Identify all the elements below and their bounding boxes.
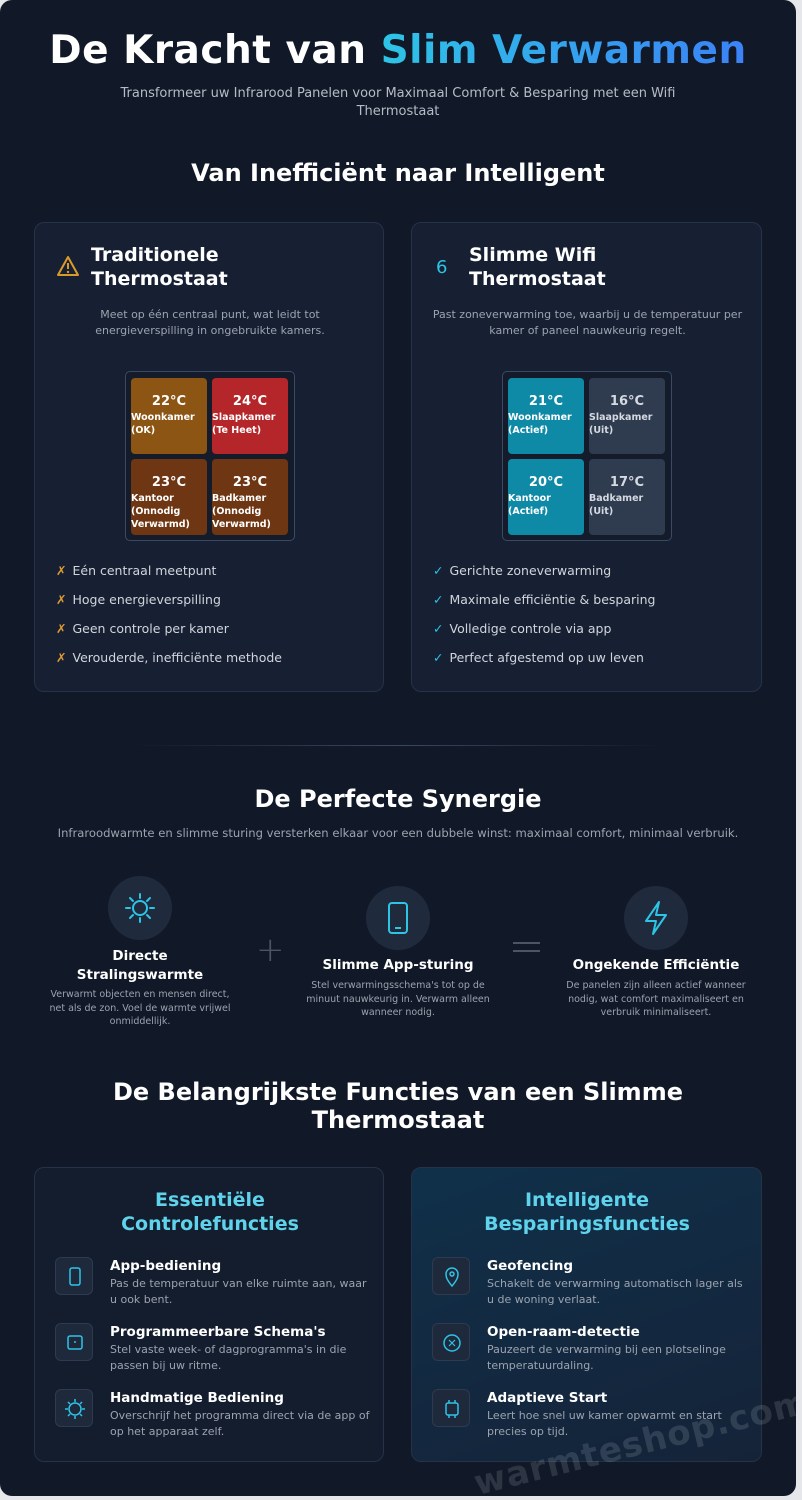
feature: schedules: Programmeerbare Schema's [110,1324,326,1340]
panel: saving functions: Intelligente [525,1189,649,1211]
room grid: Slaapkamer [589,412,652,423]
icon: wifi: 6 [436,257,447,278]
feature: app [55,1257,367,1306]
bullet list: ✗ Verouderde, inefficiënte methode [56,650,282,665]
synergy item: app: Stel verwarmingsschema's tot op de minuut nauwkeurig in. Verwarm alleen wanneer nodig. [306,980,490,1018]
feature: manual: Overschrijf het programma direct via de app of op het apparaat zelf. [110,1409,369,1438]
room grid: Woonkamer [131,412,195,423]
feature: app: App-bediening [110,1258,221,1274]
feature: adaptive start: Adaptieve Start [487,1390,607,1406]
bullet list: ✗ Geen controle per kamer [56,621,229,636]
room grid: (Onnodig [131,506,180,517]
synergy subtitle: Infraroodwarmte en slimme sturing versterken elkaar voor een dubbele winst: maximaal comfort, minimaal verbruik. [58,826,738,840]
room grid: 23°C [233,475,267,490]
room grid: (OK) [131,425,155,436]
heading: section 1: Van Inefficiënt naar Intelligent [191,159,605,187]
room grid: Badkamer [212,493,266,504]
feature: manual: Handmatige Bediening [110,1390,284,1406]
bullet list: ✓ Maximale efficiëntie & besparing [433,592,655,607]
room grid: (Uit) [589,506,613,517]
panel: essential functions: Controlefuncties [121,1213,299,1235]
room grid: Woonkamer [508,412,572,423]
feature: geofencing: Geofencing [487,1258,573,1274]
room grid: 16°C [610,394,644,409]
heading: Thermostaat [91,268,228,290]
room grid: Verwarmd) [131,519,190,530]
feature: open window: Open-raam-detectie [487,1324,640,1340]
heading [91,244,228,290]
heading: Thermostaat [469,268,606,290]
feature: adaptive start [432,1389,722,1438]
bullet list: ✗ Eén centraal meetpunt [56,563,216,578]
feature: app: Pas de temperatuur van elke ruimte aan, waar u ook bent. [110,1277,367,1306]
panel: saving functions: Besparingsfuncties [484,1213,690,1235]
room grid: (Onnodig [212,506,261,517]
feature: adaptive start: Leert hoe snel uw kamer opwarmt en start precies op tijd. [487,1409,722,1438]
room grid: 24°C [233,394,267,409]
bullet list [433,563,655,665]
feature: open window: Pauzeert de verwarming bij een plotselinge temperatuurdaling. [487,1343,726,1372]
panel: essential functions [34,1167,384,1462]
description: Past zoneverwarming toe, waarbij u de temperatuur per kamer of paneel nauwkeurig regelt. [433,308,742,337]
bullet list [56,563,282,665]
room grid: Verwarmd) [212,519,271,530]
feature: schedules: Stel vaste week- of dagprogramma's in die passen bij uw ritme. [110,1343,346,1372]
room grid: 22°C [152,394,186,409]
icon: sun [108,876,172,940]
heading: Traditionele [91,244,219,266]
synergy item: radiant heat: Directe [112,948,168,964]
room grid: (Actief) [508,425,548,436]
room grid [125,371,295,541]
title: De Kracht van Slim Verwarmen [49,28,747,73]
room grid: 20°C [529,475,563,490]
equals sign [513,942,540,952]
icon: warning [57,256,79,276]
bullet list: ✗ Hoge energieverspilling [56,592,221,607]
synergy item: efficiency: De panelen zijn alleen actief wanneer nodig, wat comfort maximaliseert en verbruik minimaliseert. [566,980,746,1018]
bullet list: ✓ Gerichte zoneverwarming [433,563,611,578]
heading [469,244,606,290]
room grid: 23°C [152,475,186,490]
room grid: (Te Heet) [212,425,261,436]
plus sign: + [256,930,284,970]
feature: geofencing: Schakelt de verwarming automatisch lager als u de woning verlaat. [487,1277,743,1306]
synergy item: radiant heat: Stralingswarmte [77,967,203,983]
panel: saving functions [411,1167,762,1462]
room grid: 17°C [610,475,644,490]
room grid: Kantoor [131,493,174,504]
panel: essential functions: Essentiële [155,1189,265,1211]
synergy item: app [306,886,490,1018]
synergy item: radiant heat: Verwarmt objecten en mensen direct, net als de zon. Voel de warmte vrijwel onmiddellijk. [49,989,230,1027]
room grid: (Uit) [589,425,613,436]
bullet list: ✓ Perfect afgestemd op uw leven [433,650,644,665]
room grid: Kantoor [508,493,551,504]
synergy item: radiant heat [49,876,230,1027]
feature: open window [432,1323,726,1372]
heading: functions: De Belangrijkste Functies van een Slimme Thermostaat [113,1078,683,1134]
description: Meet op één centraal punt, wat leidt tot energieverspilling in ongebruikte kamers. [95,308,325,337]
panel: traditional thermostat [34,222,384,692]
bullet list: ✓ Volledige controle via app [433,621,611,636]
synergy item: efficiency: Ongekende Efficiëntie [573,957,739,973]
synergy item: app: Slimme App-sturing [322,957,474,973]
heading: synergy: De Perfecte Synergie [254,785,542,813]
icon: lightning [624,886,688,950]
room grid: Badkamer [589,493,643,504]
feature: manual [55,1389,370,1438]
feature: geofencing [432,1257,743,1306]
subtitle: Transformeer uw Infrarood Panelen voor Maximaal Comfort & Besparing met een Wifi Thermostaat [120,86,675,119]
room grid: (Actief) [508,506,548,517]
room grid [502,371,672,541]
icon: phone [366,886,430,950]
synergy item: efficiency [566,886,746,1018]
panel: smart thermostat [411,222,762,692]
heading: Slimme Wifi [469,244,596,266]
feature: schedules [55,1323,346,1372]
room grid: 21°C [529,394,563,409]
room grid: Slaapkamer [212,412,275,423]
